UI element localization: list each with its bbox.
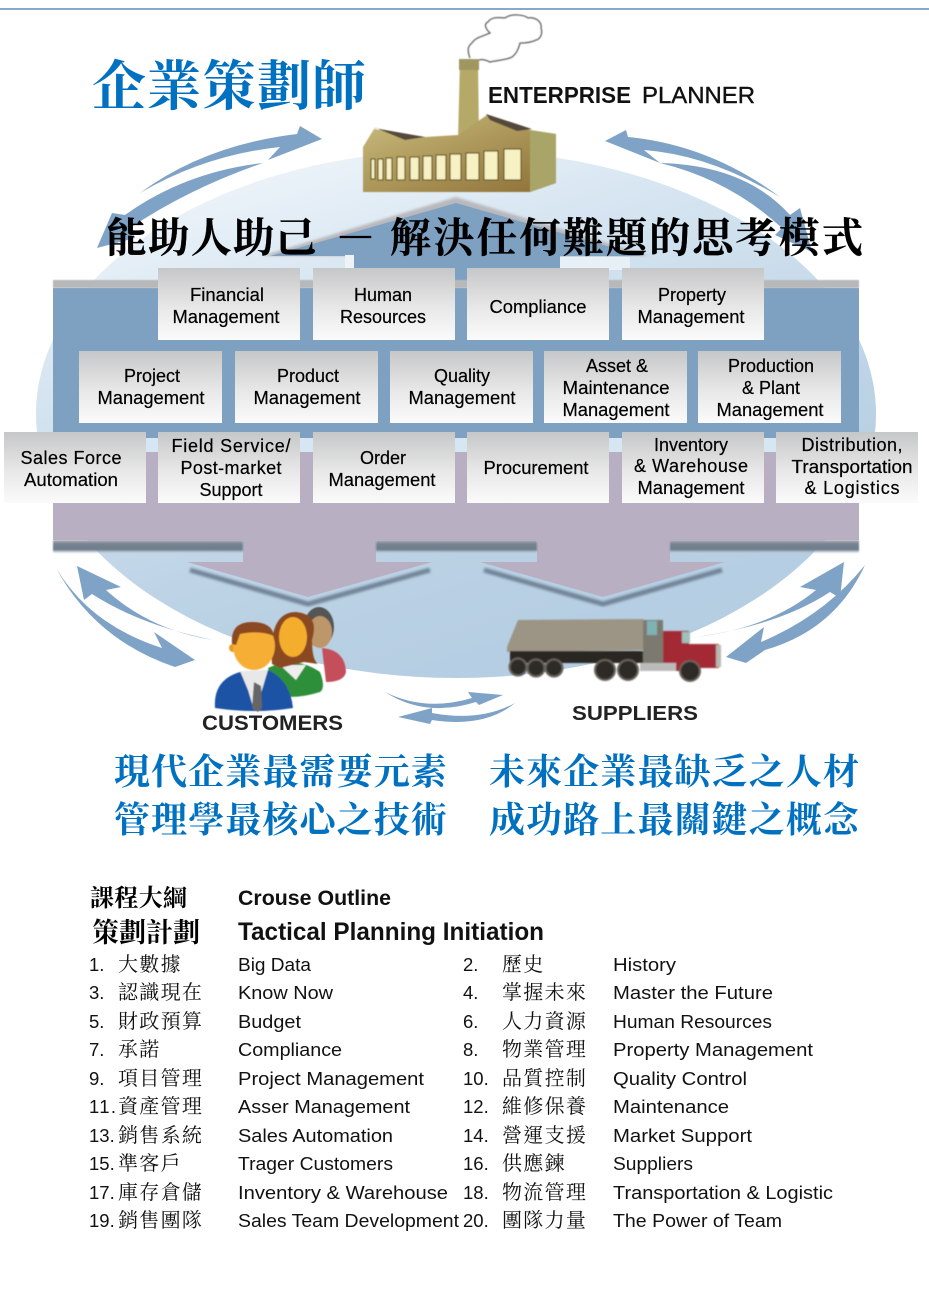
icon: truck [507, 619, 721, 681]
subtitle [106, 215, 865, 261]
slogans: 未來企業最缺乏之人材 [489, 744, 860, 795]
row 15-16: 15. [89, 1153, 115, 1174]
row 3: Procurement [484, 458, 588, 478]
row 3-4: 4. [463, 982, 478, 1003]
row 11-12: 資產管理 [118, 1090, 203, 1119]
row 17-18: 18. [463, 1182, 489, 1203]
row 2: & Plant [742, 378, 800, 398]
row 9-10 [89, 1062, 747, 1091]
row 7-8: 承諾 [118, 1033, 161, 1062]
row 7-8 [89, 1033, 813, 1062]
row 9-10: 9. [89, 1068, 104, 1089]
row 2: Quality [434, 366, 490, 386]
row 19-20: 銷售團隊 [118, 1204, 203, 1233]
row 3: Management [638, 478, 744, 498]
course table [89, 948, 833, 1233]
row 15-16: Trager Customers [238, 1153, 393, 1174]
row 1-2: 1. [89, 954, 104, 975]
row 2: Product [277, 366, 339, 386]
course outline heading: Crouse Outline [238, 886, 391, 910]
wheels [510, 658, 700, 681]
row 9-10: Project Management [238, 1068, 424, 1089]
row 11-12: Asser Management [238, 1096, 410, 1117]
row 3-4: 掌握未來 [502, 976, 587, 1005]
row 3: Order [360, 448, 406, 468]
row 3: Sales Force [20, 448, 122, 468]
course outline heading [90, 885, 544, 948]
panel: pale band [53, 438, 859, 452]
row 3-4: 認識現在 [118, 976, 203, 1005]
row 3-4 [89, 976, 773, 1005]
row 2: Project [124, 366, 180, 386]
row 1: Management [172, 307, 280, 327]
row 7-8: Property Management [613, 1039, 813, 1060]
row 5-6: Budget [238, 1011, 301, 1032]
row 2 [79, 351, 841, 423]
row 15-16: 準客戶 [118, 1147, 182, 1176]
row 3: Transportation [792, 457, 912, 477]
factory body [363, 115, 556, 192]
cab [643, 620, 663, 664]
row 11-12: Maintenance [613, 1096, 729, 1117]
row 13-14: Market Support [613, 1125, 752, 1146]
row 1 [158, 268, 764, 340]
slogans: 成功路上最關鍵之概念 [489, 792, 861, 843]
row 19-20 [89, 1204, 782, 1233]
row 2: Management [254, 388, 360, 408]
row 9-10: 品質控制 [502, 1062, 587, 1091]
label: customers: CUSTOMERS [202, 712, 343, 735]
row 3-4: 3. [89, 982, 104, 1003]
arrow: upper right pair [605, 130, 812, 252]
row 1: Compliance [490, 297, 586, 317]
course outline heading: Tactical Planning Initiation [238, 918, 544, 946]
row 3-4: Know Now [238, 982, 334, 1003]
row 3: Automation [24, 470, 118, 490]
top rule [0, 8, 929, 10]
panel: lilac outflow arrows [53, 452, 859, 604]
arrow: lower left pair [56, 566, 213, 667]
arrow shadows [53, 540, 859, 604]
row 19-20: 團隊力量 [502, 1204, 587, 1233]
row 13-14: Sales Automation [238, 1125, 393, 1146]
row 5-6: Human Resources [613, 1011, 772, 1032]
row 2: Maintenance [562, 378, 670, 398]
row 11-12: 維修保養 [502, 1090, 587, 1119]
row 1-2: 歷史 [502, 948, 545, 977]
row 7-8: 物業管理 [502, 1033, 587, 1062]
row 1: Management [638, 307, 744, 327]
arrow: upper left pair [97, 126, 322, 248]
row 3: Post-market [180, 458, 282, 478]
row 1-2 [89, 948, 677, 977]
subtitle: 解決任何難題的思考模式 [390, 215, 865, 261]
subtitle: － [335, 215, 376, 261]
icon: customers [215, 607, 346, 712]
row 1-2: History [613, 954, 677, 975]
chimney [458, 60, 479, 140]
row 17-18: 庫存倉儲 [118, 1176, 203, 1205]
arrow: lower right pair [696, 562, 865, 663]
label: suppliers: SUPPLIERS [572, 703, 698, 725]
row 1: Property [658, 285, 726, 305]
row 15-16 [89, 1147, 693, 1176]
row 2: Management [98, 388, 204, 408]
row 5-6: 財政預算 [118, 1005, 203, 1034]
row 19-20: 19. [89, 1210, 115, 1231]
row 3: Inventory [654, 435, 728, 455]
row 1: Human [354, 285, 412, 305]
subtitle: 能助人助己 [106, 215, 318, 261]
row 5-6: 人力資源 [502, 1005, 587, 1034]
row 3: & Logistics [804, 478, 900, 498]
trailer [507, 619, 645, 652]
row 13-14: 銷售系統 [118, 1119, 203, 1148]
row 5-6: 6. [463, 1011, 478, 1032]
row 5-6: 5. [89, 1011, 104, 1032]
row 3: Management [328, 470, 436, 490]
row 19-20: The Power of Team [613, 1210, 782, 1231]
row 9-10: 項目管理 [118, 1062, 203, 1091]
second person [268, 612, 323, 697]
slogans: 現代企業最需要元素 [114, 744, 448, 795]
row 1-2: 大數據 [118, 948, 182, 977]
third person [304, 607, 346, 682]
row 7-8: Compliance [238, 1039, 342, 1060]
row 15-16: Suppliers [613, 1153, 693, 1174]
upward arrow into factory [262, 197, 650, 285]
row 3: & Warehouse [634, 456, 748, 476]
row 9-10: Quality Control [613, 1068, 747, 1089]
row 2: Management [562, 400, 670, 420]
factory windows [371, 149, 521, 180]
row 17-18: 17. [89, 1182, 115, 1203]
slogans: 管理學最核心之技術 [114, 792, 448, 843]
row 2: Management [408, 388, 516, 408]
label: enterprise planner: ENTERPRISE [488, 82, 631, 108]
row 11-12: 11. [89, 1096, 116, 1117]
label: enterprise planner: PLANNER [642, 82, 755, 108]
row 17-18: Inventory & Warehouse [238, 1182, 448, 1203]
row 13-14: 13. [89, 1125, 115, 1146]
row 7-8: 7. [89, 1039, 104, 1060]
row 3 [4, 432, 918, 503]
icon: factory [363, 15, 556, 192]
slogans [114, 744, 861, 843]
row 1-2: 2. [463, 954, 478, 975]
row 5-6 [89, 1005, 772, 1034]
diagram: enterprise planner [4, 15, 918, 735]
title: 企業策劃師 [92, 57, 367, 117]
row 17-18 [89, 1176, 833, 1205]
row 13-14: 營運支援 [502, 1119, 587, 1148]
row 1: Financial [190, 285, 264, 305]
arrow: bottom centre pair [385, 692, 515, 724]
row 17-18: Transportation & Logistic [613, 1182, 833, 1203]
row 19-20: 20. [463, 1210, 489, 1231]
row 11-12 [89, 1090, 729, 1119]
panel: blue platform [53, 280, 859, 438]
row 3: Distribution, [802, 435, 902, 455]
row 2: Asset & [586, 356, 648, 376]
row 3-4: Master the Future [613, 982, 773, 1003]
module boxes [4, 268, 918, 503]
row 2: Production [728, 356, 814, 376]
row 11-12: 12. [463, 1096, 489, 1117]
row 13-14 [89, 1119, 752, 1148]
row 19-20: Sales Team Development [238, 1210, 459, 1231]
course outline heading: 策劃計劃 [92, 918, 200, 948]
first person [215, 622, 293, 712]
course outline heading: 課程大綱 [90, 885, 187, 912]
row 1: Resources [340, 307, 426, 327]
row 7-8: 8. [463, 1039, 478, 1060]
row 15-16: 供應鍊 [502, 1147, 566, 1176]
row 13-14: 14. [463, 1125, 489, 1146]
row 15-16: 16. [463, 1153, 489, 1174]
row 3: Field Service/ [172, 436, 290, 456]
background ellipse [36, 150, 876, 678]
row 17-18: 物流管理 [502, 1176, 587, 1205]
row 1-2: Big Data [238, 954, 312, 975]
row 2: Management [716, 400, 824, 420]
label: enterprise planner [488, 82, 755, 108]
row 3: Support [199, 480, 263, 500]
row 9-10: 10. [463, 1068, 489, 1089]
icon: smoke cloud [468, 15, 542, 62]
